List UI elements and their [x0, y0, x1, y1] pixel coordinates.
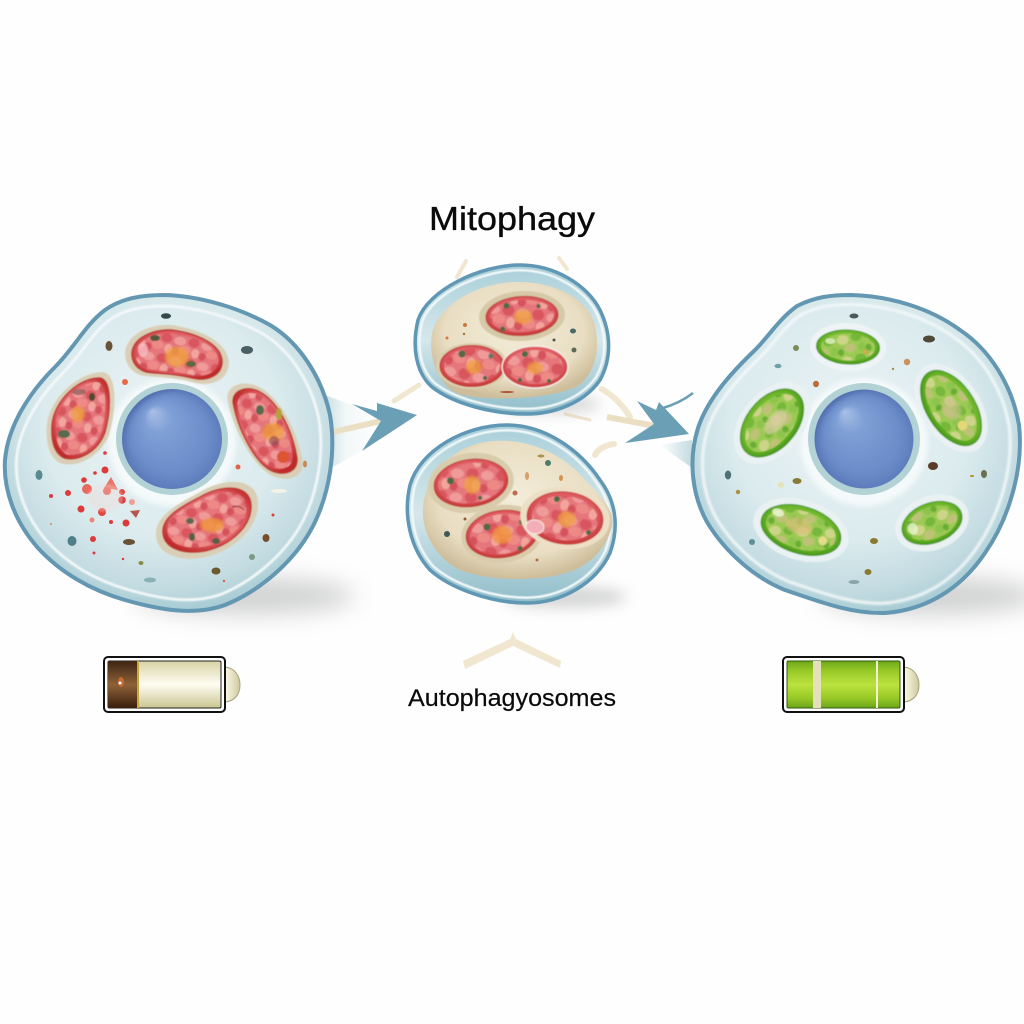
organelle dots: [36, 313, 307, 582]
damaged mitochondrion top: [125, 325, 229, 384]
cell membrane: [692, 295, 1020, 613]
chevron pointing up to autophagosomes: [463, 632, 561, 669]
small organelle dots: [446, 323, 576, 393]
mitochondrion C: [517, 482, 613, 554]
mitochondrion A: [478, 289, 566, 343]
healthy mitochondrion right: [899, 351, 1003, 465]
cell shadow: [820, 578, 1024, 614]
glass highlight: [420, 270, 604, 409]
nucleus: [108, 378, 236, 506]
vesicle wall: [407, 425, 615, 603]
mitochondrion B: [457, 500, 547, 568]
glass highlight: [412, 430, 611, 598]
arrow: autophagosomes to healthy cell: [607, 393, 693, 468]
title: Mitophagy: [429, 201, 595, 238]
healthy mitochondrion bottom right: [887, 485, 977, 561]
nucleus: [800, 378, 928, 506]
organelle dots: [725, 314, 987, 584]
panel: healthy cell: [692, 295, 1024, 614]
panel: autophagosome top: [415, 265, 609, 414]
inner cytoplasm: [16, 306, 321, 600]
cell shadow: [135, 578, 355, 614]
healthy mitochondrion left: [718, 367, 826, 479]
mitochondrion A: [424, 447, 518, 519]
damaged mitochondrion right: [227, 384, 303, 479]
vesicle lumen: [431, 282, 597, 398]
damaged mitochondrion left: [47, 372, 114, 464]
small organelle dots: [444, 454, 563, 562]
vesicle lumen: [423, 441, 612, 579]
vesicle wall: [415, 265, 609, 414]
cell membrane: [5, 295, 332, 611]
shadow: [503, 586, 627, 608]
damaged mitochondrion bottom: [156, 482, 258, 559]
arrow: damaged cell to autophagosomes: [322, 394, 417, 467]
label: Autophagyosomes: Autophagyosomes: [408, 685, 616, 712]
mitochondrion B: [436, 343, 508, 389]
inner cytoplasm: [702, 304, 1010, 603]
damaged fragments: red debris: [49, 379, 274, 582]
decorative tan strokes around autophagosomes: [394, 258, 630, 455]
mitochondrion C: [502, 346, 568, 388]
shadow: [500, 395, 600, 413]
icon: full battery: [783, 657, 919, 712]
panel: autophagosome bottom: [407, 425, 627, 608]
icon: low battery: [104, 657, 240, 712]
panel: damaged cell: [5, 295, 355, 614]
healthy mitochondrion top: [809, 321, 887, 373]
healthy mitochondrion bottom left: [745, 487, 857, 573]
